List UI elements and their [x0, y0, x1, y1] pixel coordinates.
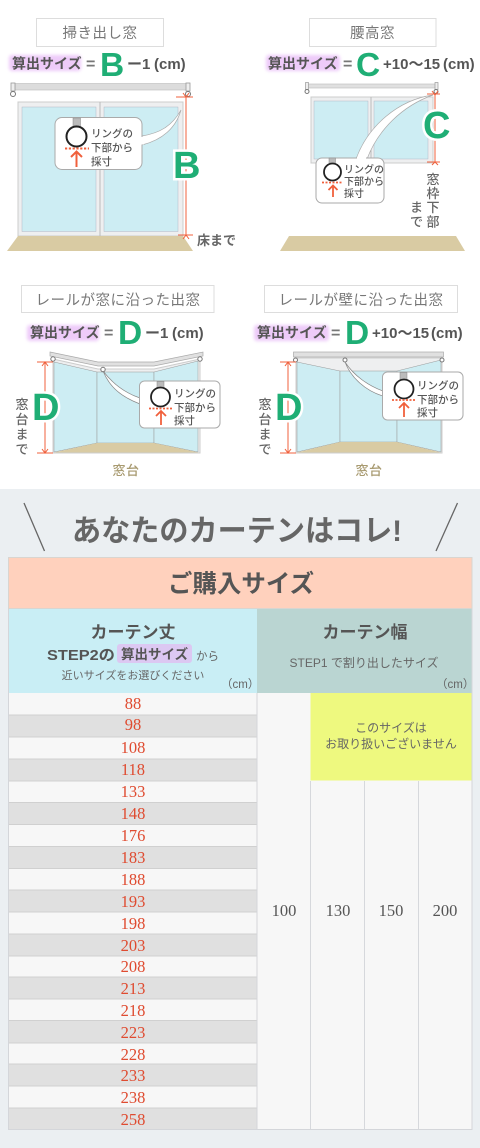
heading: rail along wall: レールが壁に沿った出窓 — [278, 292, 444, 309]
formula: D plus 10 to 15: D — [345, 315, 369, 352]
callout: measure from ring bottom — [316, 95, 433, 203]
note: to bottom of window frame: 窓枠下部 — [426, 172, 440, 230]
formula: D plus 10 to 15: = — [331, 325, 340, 342]
column header: curtain length: カーテン丈 — [90, 623, 176, 642]
curtain length rows: 108 — [121, 738, 145, 757]
label: B: B — [173, 145, 200, 187]
note: to floor: 床まで — [197, 233, 236, 248]
heading: rail along window: レールが窓に沿った出窓 — [36, 292, 200, 309]
column header: curtain width: STEP1 で割り出したサイズ — [290, 655, 438, 670]
callout: measure from ring bottom — [345, 362, 463, 420]
note: to bottom of window frame — [410, 172, 440, 230]
note: to bottom of window frame: まで — [410, 200, 423, 230]
curtain length rows: 238 — [121, 1088, 145, 1107]
callout: measure from ring bottom: 採寸 — [417, 406, 438, 419]
column header: curtain length: （cm） — [221, 678, 259, 691]
curtain width columns: 200 — [433, 901, 457, 920]
curtain length rows: 213 — [121, 979, 145, 998]
table border — [8, 609, 472, 1130]
measurement: D height — [37, 362, 53, 453]
curtain length rows: 98 — [125, 715, 141, 734]
note: to sill: 窓台まで — [258, 397, 272, 457]
callout: measure from ring bottom: リングの — [344, 163, 384, 176]
formula: C plus 10 to 15: = — [343, 56, 352, 73]
callout: measure from ring bottom: 下部から — [344, 175, 384, 188]
panel: sweep-out window — [7, 18, 236, 251]
label: D: D — [275, 387, 302, 429]
column header: curtain length: STEP2の — [47, 647, 115, 664]
heading: rail along wall — [264, 286, 458, 312]
column header: curtain length: 算出サイズ — [121, 646, 189, 662]
note: to sill: 窓台まで — [16, 397, 29, 457]
column header: curtain length: 近いサイズをお選びください — [62, 668, 204, 682]
table header: purchase size: ご購入サイズ — [168, 569, 314, 598]
callout: measure from ring bottom: 下部から — [417, 393, 459, 406]
column header: curtain length: から — [196, 650, 219, 663]
curtain length rows: 218 — [121, 1001, 145, 1020]
curtain length rows — [9, 693, 257, 1130]
heading: sweep-out window — [36, 18, 164, 46]
curtain length rows: 233 — [121, 1066, 145, 1085]
formula: B minus 1: 算出サイズ — [12, 56, 82, 72]
curtain length rows: 228 — [121, 1045, 145, 1064]
curtain length rows: 133 — [121, 782, 145, 801]
measurement: D height — [280, 362, 296, 453]
curtain length rows: 193 — [121, 892, 145, 911]
curtain length rows: 176 — [121, 826, 145, 845]
callout: measure from ring bottom: 採寸 — [91, 155, 112, 168]
curtain length rows: 258 — [121, 1110, 145, 1129]
column header: curtain width: カーテン幅 — [322, 623, 408, 642]
formula: C plus 10 to 15: +10〜15 — [383, 56, 440, 73]
callout: measure from ring bottom: 採寸 — [174, 414, 195, 427]
column header: curtain width — [257, 609, 474, 693]
formula: D plus 10 to 15: +10〜15 — [372, 325, 429, 342]
curtain length rows: 203 — [121, 936, 145, 955]
column header: curtain width: （cm） — [436, 678, 474, 691]
curtain rail — [305, 82, 438, 94]
heading: this is your curtain: あなたのカーテンはコレ! — [72, 515, 402, 548]
curtain length rows: 88 — [125, 694, 141, 713]
curtain length rows: 118 — [121, 760, 145, 779]
formula: C plus 10 to 15: 算出サイズ — [268, 56, 338, 72]
callout: measure from ring bottom: リングの — [417, 379, 459, 392]
curtain rail — [50, 352, 203, 372]
callout: measure from ring bottom — [55, 110, 181, 170]
formula: B minus 1: = — [86, 56, 95, 73]
label: D: D — [32, 387, 59, 429]
curtain length rows: 188 — [121, 870, 145, 889]
callout: measure from ring bottom: 下部から — [174, 401, 216, 414]
measurement: B height — [176, 93, 193, 239]
table header: purchase size — [8, 558, 472, 608]
panel: bay window, rail along window — [16, 286, 220, 478]
callout: measure from ring bottom: リングの — [174, 387, 216, 400]
section background — [0, 489, 480, 1148]
curtain length rows: 198 — [121, 914, 145, 933]
curtain width columns: 150 — [379, 901, 403, 920]
formula: C plus 10 to 15: C — [356, 47, 380, 84]
formula: D plus 10 to 15 — [254, 315, 463, 352]
measurement: C height — [427, 91, 440, 165]
sill label: 窓台 — [355, 463, 383, 478]
formula: C plus 10 to 15: (cm) — [443, 56, 475, 73]
formula: D minus 1: (cm) — [172, 325, 204, 342]
formula: D plus 10 to 15: 算出サイズ — [257, 324, 327, 340]
window: bay along rail — [53, 359, 200, 453]
label: C: C — [423, 105, 450, 147]
notice: size not available — [310, 693, 472, 780]
curtain rail — [10, 83, 190, 96]
window: bay along wall — [296, 358, 442, 453]
window: waist-high — [311, 97, 433, 163]
curtain width columns: 100 — [272, 901, 296, 920]
formula: D minus 1 — [27, 315, 204, 352]
formula: C plus 10 to 15 — [266, 47, 475, 84]
panel: waist-high window — [266, 18, 475, 251]
curtain length rows: 208 — [121, 957, 145, 976]
curtain rail — [294, 352, 444, 362]
callout: measure from ring bottom — [103, 371, 220, 428]
formula: D minus 1: = — [104, 325, 113, 342]
formula: B minus 1 — [9, 47, 186, 84]
heading: this is your curtain — [24, 503, 458, 551]
formula: B minus 1: (cm) — [154, 56, 186, 73]
notice: size not available: お取り扱いございません — [325, 736, 457, 751]
curtain width columns: 130 — [326, 901, 350, 920]
floor — [7, 236, 193, 251]
callout: measure from ring bottom: 採寸 — [344, 187, 364, 200]
heading: waist-high window — [310, 18, 436, 46]
heading: sweep-out window: 掃き出し窓 — [62, 24, 138, 42]
curtain length rows: 223 — [121, 1023, 145, 1042]
window: sliding glass — [18, 102, 183, 236]
formula: D plus 10 to 15: (cm) — [431, 325, 463, 342]
panel: size table section — [0, 489, 480, 1148]
curtain width columns — [257, 693, 472, 1129]
sill label: 窓台 — [112, 463, 140, 478]
panel: bay window, rail along wall — [254, 286, 463, 478]
column header: curtain length — [9, 609, 259, 693]
curtain length rows: 183 — [121, 848, 145, 867]
heading: waist-high window: 腰高窓 — [350, 25, 395, 42]
curtain length rows: 148 — [121, 804, 145, 823]
floor — [280, 236, 465, 251]
callout: measure from ring bottom: リングの — [91, 127, 133, 140]
formula: B minus 1: ー1 — [127, 56, 150, 73]
formula: D minus 1: 算出サイズ — [30, 324, 100, 340]
callout: measure from ring bottom: 下部から — [91, 141, 133, 154]
heading: rail along window — [22, 286, 214, 312]
notice: size not available: このサイズは — [355, 720, 427, 735]
formula: B minus 1: B — [100, 47, 124, 84]
formula: D minus 1: ー1 — [145, 325, 168, 342]
formula: D minus 1: D — [118, 315, 142, 352]
